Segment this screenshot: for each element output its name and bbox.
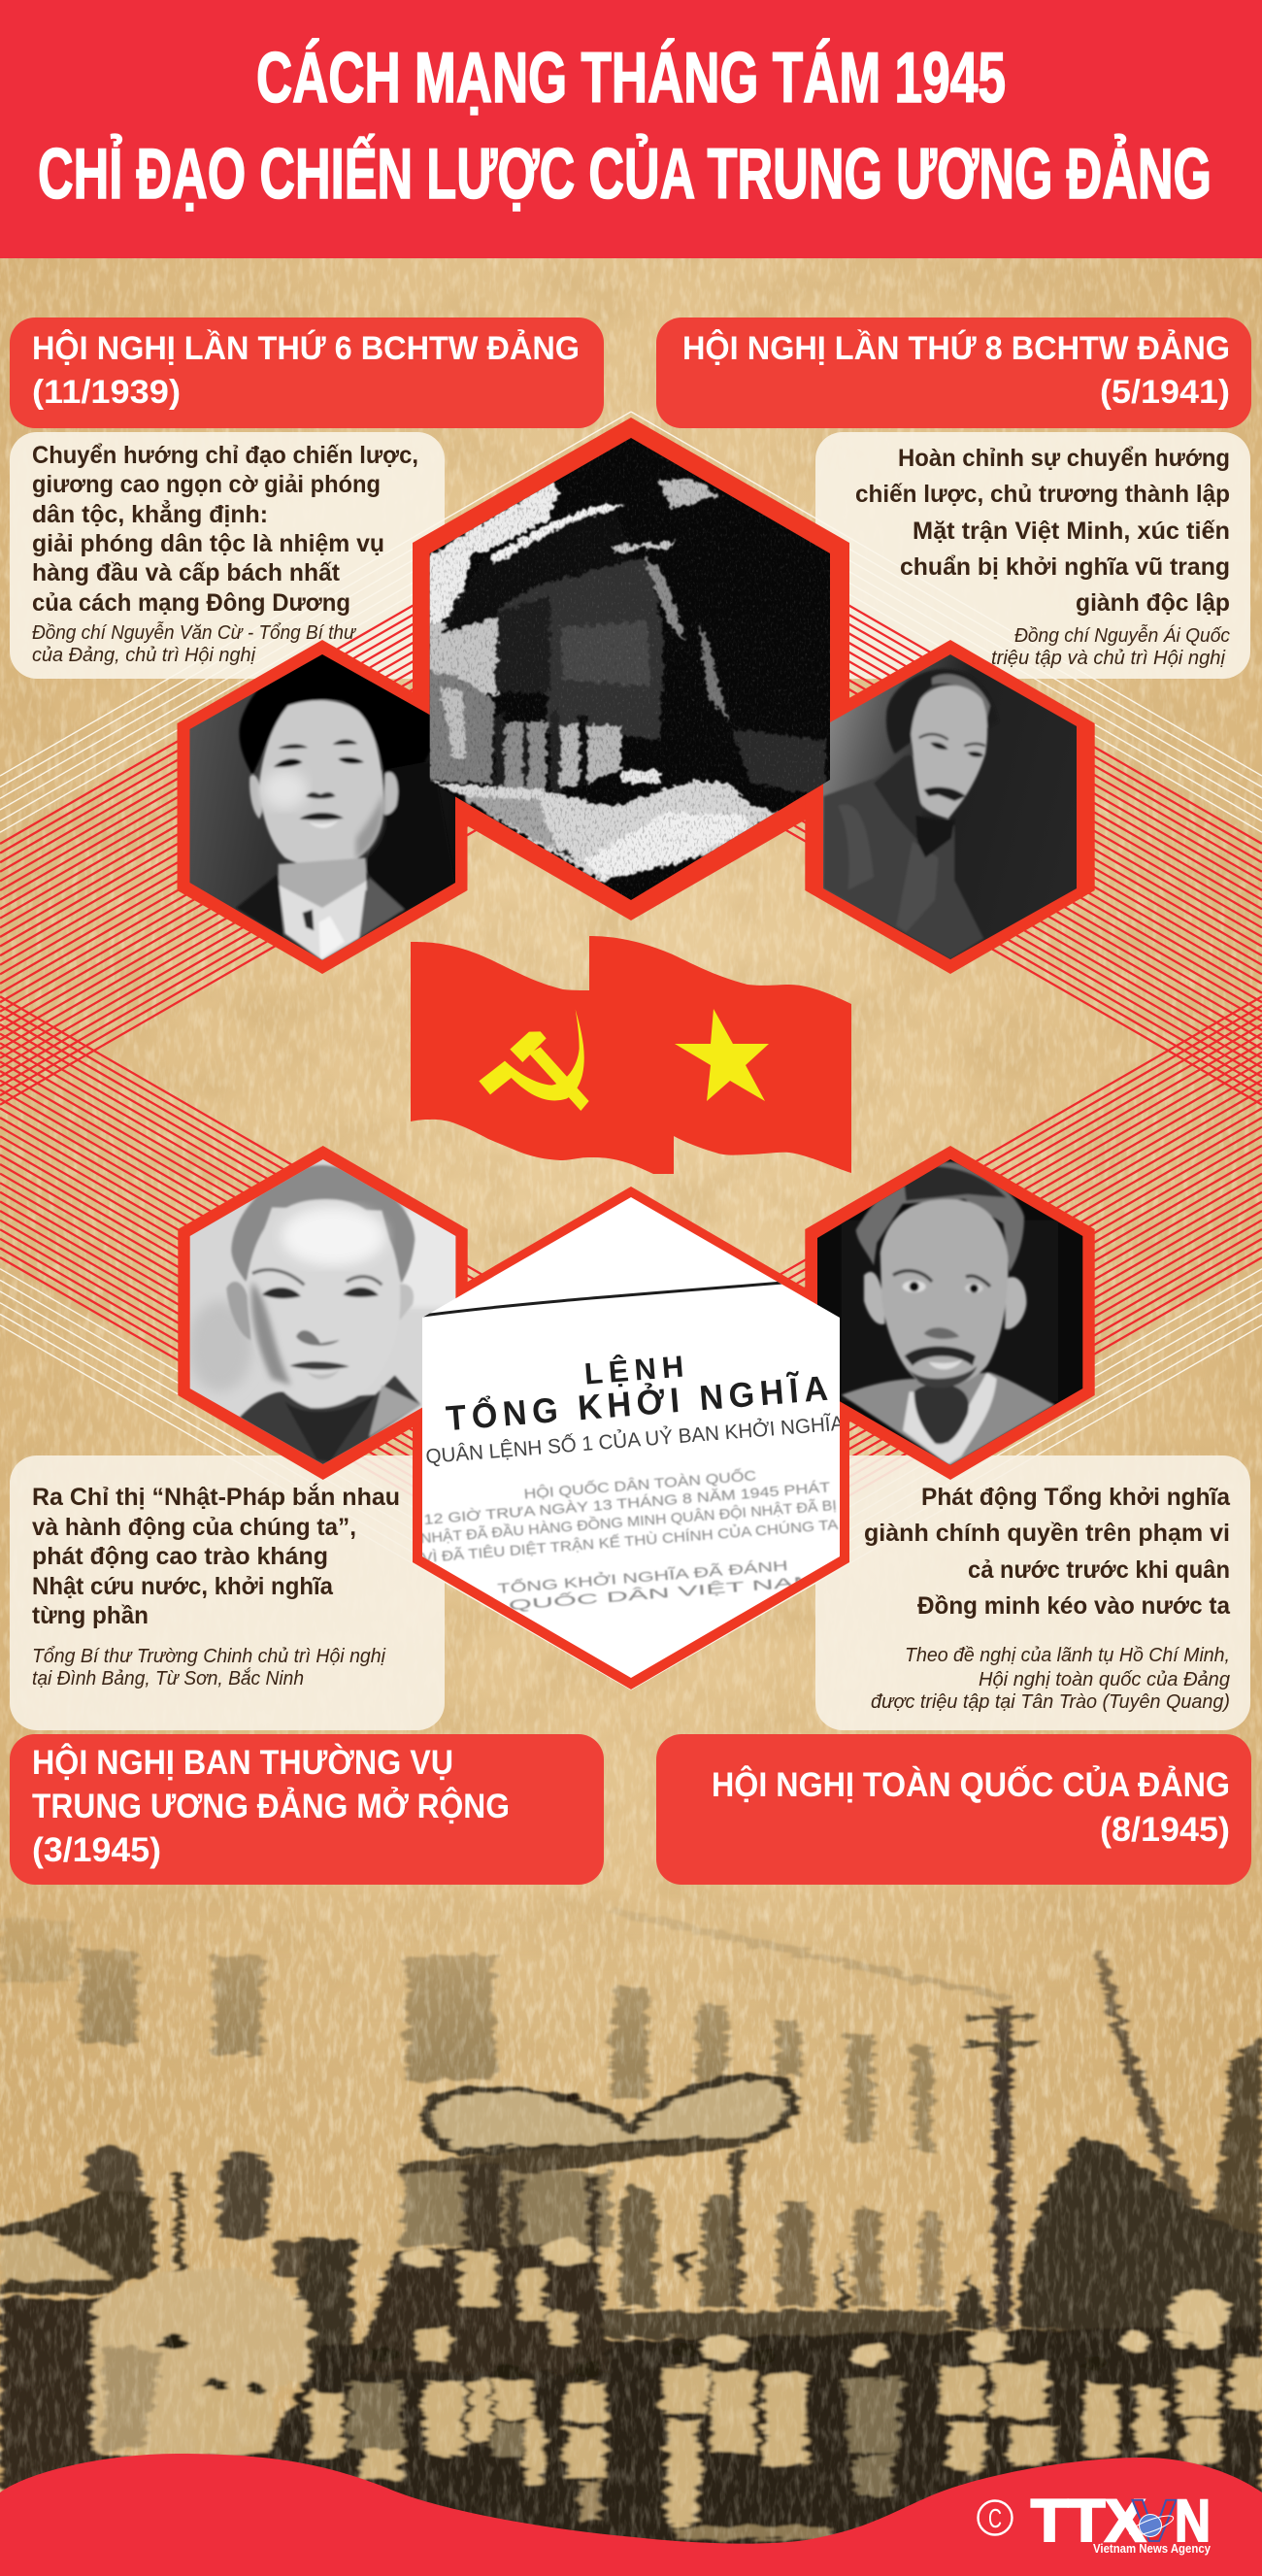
document heading: TỔNG KHỞI NGHĨA — [445, 1365, 835, 1438]
text block: conference 8: Đồng chí Nguyễn Ái Quốc — [1014, 624, 1230, 647]
hammer and sickle — [479, 1009, 589, 1111]
text block: conference 8: Hoàn chỉnh sự chuyển hướng — [898, 445, 1230, 472]
text block: conference 6: của cách mạng Đông Dương — [32, 589, 350, 617]
text block: conference 8: giành độc lập — [1076, 589, 1230, 617]
logo: TTXVN Vietnam News Agency: N — [1175, 2488, 1211, 2554]
document heading — [427, 1354, 840, 1466]
heading box: conference 6 — [10, 318, 604, 428]
text block: standing committee — [32, 1482, 400, 1689]
portrait: Nguyen Ai Quoc, top right — [823, 654, 1077, 959]
text block: conference 8: triệu tập và chủ trì Hội nghị — [991, 648, 1226, 669]
text block: conference 8: chuẩn bị khởi nghĩa vũ trang — [900, 553, 1230, 581]
text block: national conference — [864, 1484, 1231, 1713]
logo: TTXVN Vietnam News Agency: V — [1132, 2488, 1177, 2554]
star — [675, 1009, 769, 1101]
text block: standing committee: Nhật cứu nước, khởi nghĩa — [32, 1573, 334, 1600]
text block: conference 8: chiến lược, chủ trương thành lập — [855, 481, 1230, 508]
heading box: standing committee: HỘI NGHỊ BAN THƯỜNG VỤ — [32, 1743, 453, 1782]
document body text: TỔNG KHỞI NGHĨA ĐÃ ĐÁNH — [497, 1556, 788, 1597]
logo: TTXVN Vietnam News Agency: C — [988, 2503, 1002, 2533]
portrait: Ho Chi Minh, bottom right — [817, 1159, 1083, 1465]
text block: conference 6: giương cao ngọn cờ giải phóng — [32, 471, 381, 498]
text block: national conference: Phát động Tổng khởi nghĩa — [921, 1484, 1231, 1511]
heading box: conference 6: (11/1939) — [32, 374, 181, 411]
card background: standing committee — [10, 1455, 445, 1730]
logo: TTXVN Vietnam News Agency: TTX — [1031, 2488, 1146, 2554]
document heading: QUÂN LỆNH SỐ 1 CỦA UỶ BAN KHỞI NGHĨA — [425, 1411, 845, 1468]
heading box: conference 8: HỘI NGHỊ LẦN THỨ 8 BCHTW ĐẢNG — [682, 329, 1230, 367]
text block: conference 6 — [32, 442, 418, 666]
document body text: VÌ ĐÃ TIÊU DIỆT TRẬN KẾ THÙ CHÍNH CỦA CHÚNG TA — [421, 1516, 839, 1566]
text block: standing committee: Ra Chỉ thị “Nhật-Pháp bắn nhau — [32, 1482, 400, 1511]
document body text: QUỐC DÂN VIỆT NAM — [508, 1572, 819, 1614]
card background: national conference — [815, 1455, 1250, 1730]
document body text: HỘI QUỐC DÂN TOÀN QUỐC — [523, 1466, 757, 1503]
diagonal hatch bands — [0, 412, 1262, 1689]
text block: conference 6: hàng đầu và cấp bách nhất — [32, 559, 341, 586]
logo: TTXVN Vietnam News Agency — [979, 2488, 1212, 2556]
document body text — [422, 1468, 839, 1612]
document heading: LỆNH — [583, 1348, 691, 1391]
text block: conference 8: Mặt trận Việt Minh, xúc tiến — [913, 518, 1230, 545]
text block: national conference: Đồng minh kéo vào nước ta — [917, 1592, 1231, 1620]
text block: conference 8 — [855, 445, 1230, 669]
portrait: Truong Chinh — [190, 1159, 456, 1464]
text block: conference 6: Chuyển hướng chỉ đạo chiến lược, — [32, 442, 418, 469]
heading box: conference 6: HỘI NGHỊ LẦN THỨ 6 BCHTW ĐẢNG — [32, 329, 580, 367]
text block: standing committee: Tổng Bí thư Trường Chinh chủ trì Hội nghị — [32, 1646, 386, 1667]
document body text: NHẬT ĐÃ ĐẦU HÀNG ĐỒNG MINH QUÂN ĐỘI NHẬT ĐÃ BỊ — [419, 1496, 837, 1547]
logo: TTXVN Vietnam News Agency: Vietnam News Agency — [1093, 2541, 1212, 2556]
heading box: conference 8: (5/1941) — [1100, 374, 1230, 411]
text block: standing committee: phát động cao trào kháng — [32, 1543, 328, 1570]
heading box: standing committee — [10, 1734, 604, 1885]
text block: standing committee: tại Đình Bảng, Từ Sơn, Bắc Ninh — [32, 1667, 304, 1689]
heading box: national conference: HỘI NGHỊ TOÀN QUỐC CỦA ĐẢNG — [712, 1765, 1230, 1804]
text block: national conference: được triệu tập tại Tân Trào (Tuyên Quang) — [871, 1691, 1230, 1713]
photo: "Lenh Tong Khoi Nghia" document — [413, 1187, 854, 1689]
text block: national conference: giành chính quyền trên phạm vi — [864, 1520, 1230, 1547]
red waving flags — [411, 936, 851, 1174]
photo: thatched hut in the forest — [429, 438, 830, 900]
text block: national conference: Theo đề nghị của lãnh tụ Hồ Chí Minh, — [905, 1645, 1230, 1666]
heading box: conference 8 — [656, 318, 1251, 428]
text block: national conference: Hội nghị toàn quốc của Đảng — [979, 1669, 1230, 1690]
portrait: Nguyen Van Cu — [190, 654, 455, 960]
card background: conference 6 — [10, 432, 445, 679]
flags: party flag and national flag — [411, 936, 851, 1174]
card background: conference 8 — [815, 432, 1250, 679]
document body text: 12 GIỜ TRƯA NGÀY 13 THÁNG 8 NĂM 1945 PHÁT — [423, 1479, 831, 1528]
document top edge — [423, 1282, 782, 1317]
heading box: standing committee: TRUNG ƯƠNG ĐẢNG MỞ RỘNG — [32, 1787, 510, 1825]
hexagon frames: centre hexes behind side frames — [177, 418, 1095, 1689]
text block: conference 6: giải phóng dân tộc là nhiệm vụ — [32, 530, 384, 557]
text block: national conference: cả nước trước khi quân — [968, 1556, 1230, 1584]
heading box: national conference: (8/1945) — [1100, 1811, 1230, 1849]
header band — [0, 0, 1262, 258]
heading box: standing committee: (3/1945) — [32, 1831, 161, 1869]
text block: conference 6: Đồng chí Nguyễn Văn Cừ - Tổng Bí thư — [32, 621, 356, 644]
text block: standing committee: và hành động của chúng ta”, — [32, 1514, 356, 1541]
heading box: national conference — [656, 1734, 1251, 1885]
text block: standing committee: từng phần — [32, 1602, 149, 1629]
bottom sepia photo: crowd in front of the Bac Bo palace — [0, 1893, 1262, 2576]
bottom red wave — [0, 2454, 1262, 2576]
text block: conference 6: dân tộc, khẳng định: — [32, 498, 268, 528]
text block: conference 6: của Đảng, chủ trì Hội nghị — [32, 645, 256, 666]
